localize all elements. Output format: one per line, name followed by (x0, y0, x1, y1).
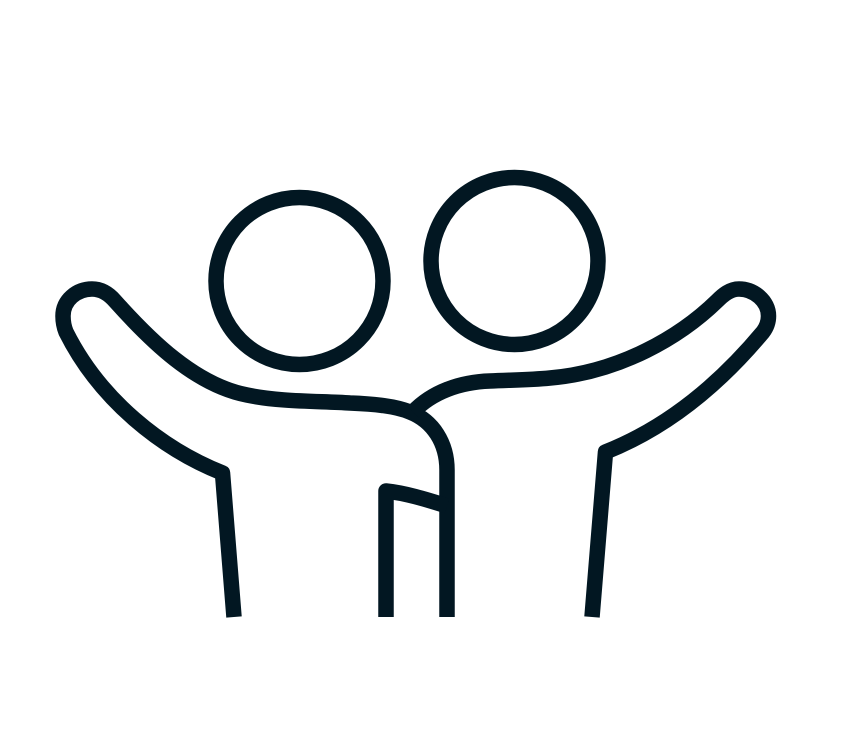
left person head (216, 198, 383, 364)
right person head (431, 178, 598, 344)
left person body and raised arm (63, 289, 447, 617)
inner arm gap (386, 491, 447, 617)
right person body and raised arm (413, 289, 768, 617)
